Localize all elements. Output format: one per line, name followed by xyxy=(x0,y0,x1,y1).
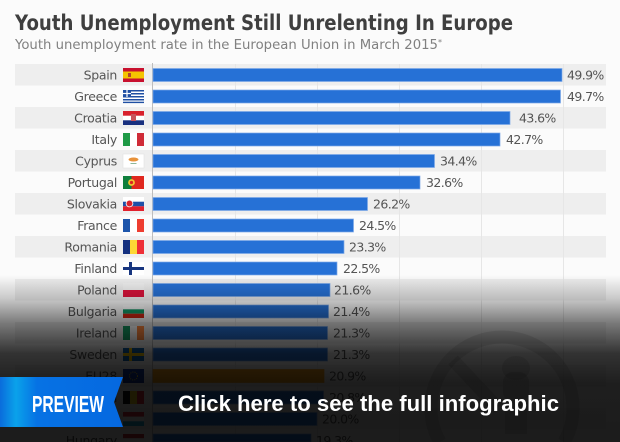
flag: Italy xyxy=(123,133,144,146)
flag: Belgium xyxy=(123,391,144,404)
subtitle: * xyxy=(438,38,442,47)
country labels: Finland xyxy=(74,261,117,276)
flag: Spain xyxy=(123,68,144,82)
country labels: Romania xyxy=(64,240,117,254)
flag: EU xyxy=(123,369,144,383)
country labels: Slovakia xyxy=(67,196,117,212)
flag: Hungary xyxy=(123,434,144,442)
ribbon label: PREVIEW xyxy=(32,391,104,417)
country labels: Croatia xyxy=(74,110,117,126)
value labels: 32.6% xyxy=(426,175,463,190)
country labels: Belgium xyxy=(68,390,117,405)
flag: Ireland xyxy=(123,326,144,340)
flag: Cyprus xyxy=(123,154,144,168)
flag: Slovakia xyxy=(123,197,144,211)
value labels: 20.9% xyxy=(329,368,366,384)
country labels: Greece xyxy=(74,89,118,104)
grid lines xyxy=(236,64,564,442)
value labels: 26.2% xyxy=(373,196,410,212)
call to action: Click here to see the full infographic xyxy=(178,391,559,416)
flag: Romania xyxy=(123,240,144,254)
value labels: 43.6% xyxy=(519,110,556,126)
country labels: Ireland xyxy=(76,326,117,340)
flag: Sweden xyxy=(123,348,144,361)
value labels: 22.5% xyxy=(343,261,380,276)
title: Youth Unemployment Still Unrelenting In Europe xyxy=(14,11,513,36)
flags xyxy=(123,68,144,442)
flag: Portugal xyxy=(123,176,144,189)
value labels: 20.8% xyxy=(329,390,366,405)
country labels: Sweden xyxy=(69,347,117,362)
value labels: 23.3% xyxy=(349,240,386,254)
flag: Finland xyxy=(123,262,144,275)
flag: Croatia xyxy=(123,111,144,125)
flag: France xyxy=(123,219,144,232)
value labels: 21.6% xyxy=(334,282,371,298)
flag: Greece xyxy=(123,90,144,103)
value labels: 24.5% xyxy=(359,218,396,233)
value labels: 21.3% xyxy=(333,347,370,362)
subtitle: Youth unemployment rate in the European Union in March 2015 xyxy=(14,37,438,53)
value labels: 49.7% xyxy=(567,89,604,104)
value labels: 21.3% xyxy=(333,326,370,340)
dark fade overlay xyxy=(0,275,620,442)
value labels: 34.4% xyxy=(440,154,477,168)
country labels xyxy=(42,68,118,442)
row stripes xyxy=(15,64,606,430)
country labels: Poland xyxy=(77,282,117,298)
country labels: Cyprus xyxy=(75,154,117,168)
country labels: France xyxy=(77,218,118,233)
country labels: Spain xyxy=(84,68,117,82)
value labels: 42.7% xyxy=(506,132,543,147)
flag: Bulgaria xyxy=(123,305,144,318)
country labels: Luxembourg xyxy=(42,412,117,426)
country labels: Portugal xyxy=(68,175,117,190)
country labels: Bulgaria xyxy=(68,304,117,319)
country labels: EU28 xyxy=(85,368,117,384)
flag: Luxembourg xyxy=(123,412,144,426)
value labels: 21.4% xyxy=(333,304,370,319)
bars xyxy=(153,68,562,442)
country labels: Italy xyxy=(91,132,118,147)
icon: watermark emblem xyxy=(431,337,573,442)
flag: Poland xyxy=(123,283,144,297)
preview ribbon xyxy=(0,377,123,427)
value labels: 20.0% xyxy=(322,412,359,426)
value labels xyxy=(316,68,604,442)
value labels: 49.9% xyxy=(567,68,604,82)
